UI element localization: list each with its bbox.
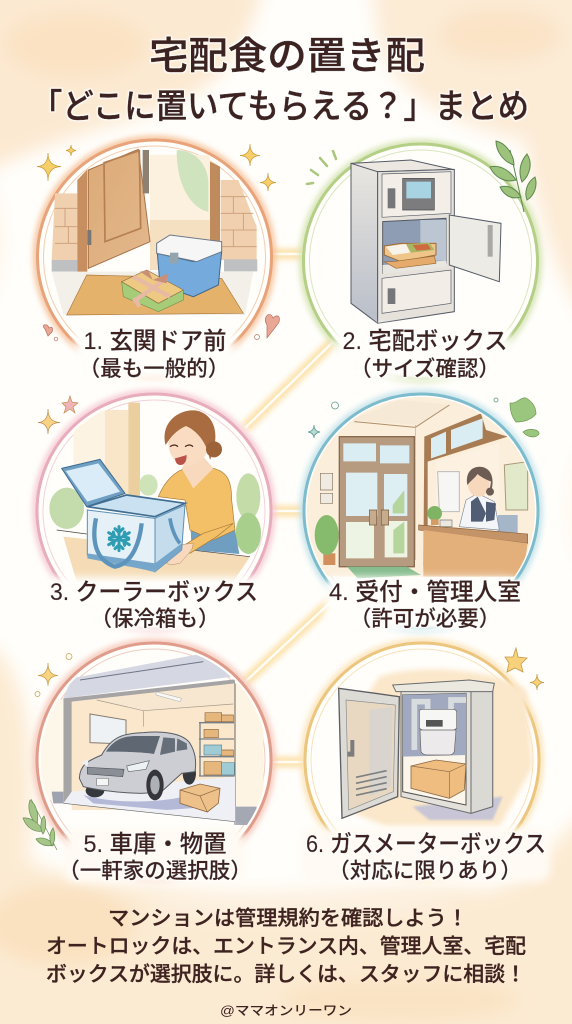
- label 6: [300, 828, 550, 883]
- icon: sparkle and dots: [35, 654, 72, 696]
- panel 6: gas meter box: [300, 642, 550, 883]
- label 1: [75, 326, 235, 381]
- icon: teal sparkle and dots: [308, 398, 498, 438]
- icon: green leaves: [510, 398, 539, 437]
- label 5: （一軒家の選択肢）: [58, 859, 252, 883]
- label 1: （最も一般的）: [79, 357, 229, 381]
- label 3: 3. クーラーボックス: [50, 579, 258, 606]
- icon: sparkle and star: [38, 396, 78, 434]
- icon: sparkle lines: [307, 151, 336, 184]
- ring 6: [304, 642, 540, 878]
- connector rays: [245, 254, 335, 762]
- label 2: 2. 宅配ボックス: [342, 328, 508, 355]
- label 4: （許可が必要）: [350, 607, 500, 631]
- ring 2: [302, 143, 538, 379]
- title: 「どこに置いてもらえる？」まとめ: [31, 88, 529, 126]
- label 2: [335, 326, 510, 381]
- panel 1: entrance door: [36, 139, 280, 381]
- panel 3: cooler box: [36, 393, 272, 631]
- panel 5: garage: [23, 642, 272, 883]
- label 6: 6. ガスメーターボックス: [306, 831, 546, 858]
- ring 3: [36, 393, 272, 629]
- illustration: gas meter cabinet: [339, 669, 533, 827]
- label 3: （保冷箱も）: [90, 607, 220, 631]
- label 6: （対応に限りあり）: [328, 859, 522, 883]
- ring 4: [303, 393, 539, 629]
- label 3: [45, 577, 265, 631]
- ring 1: [36, 139, 272, 375]
- panel 2: delivery box: [302, 141, 538, 381]
- footer note: マンションは管理規約を確認しよう！: [108, 907, 468, 930]
- illustration: woman with cooler bag: [49, 403, 261, 582]
- ring 5: [36, 642, 272, 878]
- icon: leaf sprig: [490, 141, 536, 212]
- icon: gold sparkles: [37, 144, 276, 191]
- illustration: door, cooler and gift: [52, 149, 257, 315]
- illustration: car in garage: [40, 653, 263, 825]
- title: [31, 36, 529, 126]
- icon: leaf sprig: [23, 799, 57, 850]
- label 5: 5. 車庫・物置: [84, 831, 226, 858]
- label 1: 1. 玄関ドア前: [84, 328, 226, 355]
- panel 4: reception: [303, 393, 539, 631]
- illustration: lobby and receptionist: [306, 397, 539, 578]
- illustration: locker with open door: [351, 160, 501, 323]
- icon: hearts: [43, 314, 280, 341]
- footer note: ボックスが選択肢に。詳しくは、スタッフに相談！: [46, 963, 526, 986]
- title: 宅配食の置き配: [149, 36, 425, 78]
- label 4: 4. 受付・管理人室: [329, 579, 521, 606]
- icon: gold star and sparkle: [505, 648, 544, 690]
- footer note: [46, 907, 526, 986]
- label 2: （サイズ確認）: [350, 357, 500, 381]
- label 4: [325, 577, 521, 631]
- credit: @ママオンリーワン: [220, 1003, 352, 1018]
- label 5: [58, 828, 252, 883]
- footer note: オートロックは、エントランス内、管理人室、宅配: [46, 935, 526, 958]
